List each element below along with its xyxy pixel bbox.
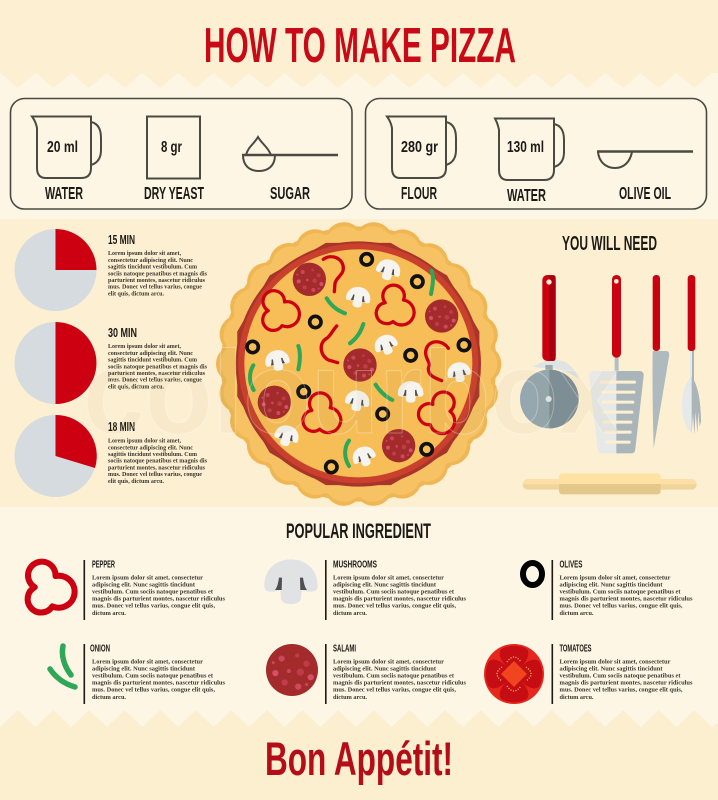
- text block: 15 min: Lorem ipsum dolor sit amet,: [108, 250, 181, 257]
- top background with zigzag edge: [0, 0, 718, 88]
- tool: fork: [682, 275, 701, 434]
- ingredient: salami: vestibulum. Cum sociis natoque penatibus et: [333, 672, 455, 680]
- label: water: WATER: [45, 183, 83, 203]
- icon: pepper: [28, 562, 75, 613]
- ingredient: onion: mus. Donec vel tellus varius, congue elit quis,: [92, 687, 215, 694]
- ingredient: mushrooms: [264, 559, 466, 620]
- text block: 30 min: consectetur adipiscing elit. Nunc: [108, 350, 193, 357]
- icon: olive: [523, 563, 542, 585]
- ingredient: mushrooms: mus. Donec vel tellus varius, congue elit quis,: [333, 603, 456, 610]
- icon: jug 130 ml: 130 ml: [507, 139, 544, 156]
- ingredient: mushrooms: Lorem ipsum dolor sit amet, consectetur: [333, 574, 444, 581]
- icon: jug 130 ml: [495, 118, 564, 180]
- text block: 15 min: parturient montes, nascetur ridiculus: [108, 277, 205, 284]
- ingredient: onion: vestibulum. Cum sociis natoque penatibus et: [92, 672, 214, 680]
- ingredient: mushrooms: magnis dis parturient montes, nascetur ridiculus: [333, 596, 466, 603]
- salami slices: [258, 263, 458, 462]
- ingredient: tomatoes: adipiscing elit. Nunc sagittis tincidunt: [560, 665, 663, 672]
- text block: 15 min: sociis natoque penatibus et magnis dis: [108, 270, 207, 277]
- bottom background with zigzag edge: [0, 710, 718, 800]
- ingredient: olives: mus. Donec vel tellus varius, congue elit quis,: [560, 603, 683, 610]
- panel: ingredients right: [366, 98, 706, 209]
- ingredient: pepper: vestibulum. Cum sociis natoque penatibus et: [92, 588, 214, 596]
- text block: 30 min: parturient montes, nascetur ridiculus: [108, 370, 205, 377]
- tool: knife: [652, 275, 669, 448]
- panel: ingredients left: [10, 98, 352, 209]
- text block: 30 min: sagittis tincidunt vestibulum. Cum: [108, 357, 197, 364]
- ingredient: pepper: Lorem ipsum dolor sit amet, consectetur: [92, 574, 203, 581]
- text block: 15 min: sagittis tincidunt vestibulum. Cum: [108, 264, 197, 271]
- ingredient: salami: magnis dis parturient montes, nascetur ridiculus: [333, 680, 466, 687]
- label: water: WATER: [507, 185, 546, 205]
- text block: 18 min: [108, 419, 207, 485]
- text block: 30 min: elit quis, dictum arcu.: [108, 383, 164, 390]
- icon: jug 280 gr: [387, 116, 456, 178]
- tool: rolling pin: [523, 473, 697, 494]
- onion strips: [250, 271, 433, 466]
- text block: 30 min: mus. Donec vel tellus varius, congue: [108, 377, 202, 384]
- ingredient: onion: [50, 644, 225, 704]
- ingredient: tomatoes: magnis dis parturient montes, nascetur ridiculus: [560, 680, 693, 687]
- ingredient: olives: OLIVES: [560, 560, 583, 570]
- pie chart: 30 min: [14, 322, 96, 404]
- ingredient: mushrooms: MUSHROOMS: [333, 560, 377, 570]
- icon: jug 280 gr: 280 gr: [401, 139, 438, 156]
- ingredient: mushrooms: dictum arcu.: [333, 610, 367, 617]
- ingredient: olives: dictum arcu.: [560, 610, 594, 617]
- icon: dry yeast packet: [147, 116, 200, 178]
- icon: tomato: [484, 644, 544, 704]
- text block: 30 min: [108, 325, 207, 390]
- kitchen tools: [520, 275, 701, 494]
- text block: 30 min: sociis natoque penatibus et magnis dis: [108, 363, 207, 370]
- crust: [221, 226, 496, 502]
- cheese: [244, 249, 472, 477]
- label: sugar: SUGAR: [270, 183, 310, 203]
- icon: dry yeast packet: 8 gr: [161, 139, 182, 156]
- ingredient: olives: magnis dis parturient montes, nascetur ridiculus: [560, 596, 693, 603]
- title: HOW TO MAKE PIZZA: [204, 19, 516, 73]
- ingredient: tomatoes: TOMATOES: [560, 644, 592, 654]
- icon: jug 20 ml: 20 ml: [47, 139, 78, 156]
- text block: 18 min: sagittis tincidunt vestibulum. Cum: [108, 451, 197, 458]
- watermark: colourbox: [83, 327, 620, 459]
- ingredient: tomatoes: vestibulum. Cum sociis natoque penatibus et: [560, 672, 681, 680]
- ingredient: salami: [266, 644, 466, 704]
- ingredient: tomatoes: dictum arcu.: [560, 694, 594, 701]
- text block: 18 min: sociis natoque penatibus et magnis dis: [108, 458, 207, 465]
- text block: 15 min: elit quis, dictum arcu.: [108, 290, 164, 297]
- ingredient: onion: ONION: [90, 644, 110, 654]
- text block: 15 min: [108, 232, 207, 297]
- pepper pieces: [321, 257, 448, 381]
- tool: pizza cutter: [520, 275, 579, 428]
- mushrooms: [263, 257, 472, 470]
- text block: 15 min: 15 MIN: [108, 232, 135, 247]
- tool: spatula: [589, 275, 644, 453]
- text block: 30 min: Lorem ipsum dolor sit amet,: [108, 343, 181, 350]
- ingredient: pepper: [28, 560, 225, 620]
- pizza illustration: [221, 226, 496, 502]
- ingredient: olives: adipiscing elit. Nunc sagittis tincidunt: [560, 581, 663, 588]
- text block: 18 min: Lorem ipsum dolor sit amet,: [108, 438, 181, 445]
- text block: 18 min: mus. Donec vel tellus varius, congue: [108, 471, 202, 478]
- icon: salami: [266, 644, 318, 696]
- middle band background: [0, 219, 718, 507]
- label: olive oil: OLIVE OIL: [619, 183, 671, 203]
- ingredient: tomatoes: [484, 644, 693, 704]
- text block: 18 min: 18 MIN: [108, 419, 135, 434]
- ingredient: onion: Lorem ipsum dolor sit amet, consectetur: [92, 658, 203, 665]
- ingredient: onion: magnis dis parturient montes, nascetur ridiculus: [92, 680, 225, 687]
- text block: 15 min: mus. Donec vel tellus varius, congue: [108, 284, 202, 291]
- heading: popular ingredient: POPULAR INGREDIENT: [286, 520, 431, 543]
- text block: 18 min: consectetur adipiscing elit. Nunc: [108, 444, 193, 451]
- text block: 18 min: elit quis, dictum arcu.: [108, 478, 164, 485]
- icon: jug 20 ml: [32, 116, 101, 178]
- ingredient: salami: mus. Donec vel tellus varius, congue elit quis,: [333, 687, 456, 694]
- icon: mushroom: [264, 559, 318, 604]
- closing message: Bon Appétit!: [265, 732, 453, 785]
- sauce ring: [236, 241, 481, 487]
- heading: you will need: YOU WILL NEED: [562, 233, 657, 255]
- text block: 18 min: parturient montes, nascetur ridiculus: [108, 464, 205, 471]
- label: flour: FLOUR: [401, 183, 437, 203]
- ingredient: pepper: mus. Donec vel tellus varius, congue elit quis,: [92, 603, 215, 610]
- icon: sugar spoon: [242, 137, 338, 171]
- ingredient: salami: Lorem ipsum dolor sit amet, consectetur: [333, 658, 444, 665]
- ingredient: tomatoes: mus. Donec vel tellus varius, congue elit quis,: [560, 687, 683, 694]
- text block: 15 min: consectetur adipiscing elit. Nunc: [108, 257, 193, 264]
- ingredient: salami: dictum arcu.: [333, 694, 367, 701]
- pepper rings: [263, 282, 468, 441]
- ingredient: mushrooms: vestibulum. Cum sociis natoque penatibus et: [333, 588, 455, 596]
- ingredient: pepper: dictum arcu.: [92, 610, 126, 617]
- text block: 30 min: 30 MIN: [108, 325, 137, 340]
- ingredient: olives: Lorem ipsum dolor sit amet, consectetur: [560, 574, 671, 581]
- ingredient: tomatoes: Lorem ipsum dolor sit amet, consectetur: [560, 658, 671, 665]
- icon: olive oil spoon: [597, 152, 693, 168]
- pie chart: 18 min: [14, 415, 97, 497]
- ingredient: salami: SALAMI: [333, 644, 356, 654]
- icon: onion: [50, 646, 75, 687]
- ingredient: mushrooms: adipiscing elit. Nunc sagittis tincidunt: [333, 581, 437, 588]
- ingredient: onion: dictum arcu.: [92, 694, 126, 701]
- label: dry yeast: DRY YEAST: [144, 183, 204, 203]
- ingredient: pepper: magnis dis parturient montes, nascetur ridiculus: [92, 596, 225, 603]
- ingredient: salami: adipiscing elit. Nunc sagittis tincidunt: [333, 665, 437, 672]
- pie chart: 15 min: [14, 229, 96, 311]
- olives: [247, 254, 470, 473]
- ingredient: pepper: adipiscing elit. Nunc sagittis tincidunt: [92, 581, 196, 588]
- ingredient: olives: [523, 560, 693, 620]
- ingredient: olives: vestibulum. Cum sociis natoque penatibus et: [560, 588, 681, 596]
- ingredient: onion: adipiscing elit. Nunc sagittis tincidunt: [92, 665, 196, 672]
- ingredient: pepper: PEPPER: [92, 560, 115, 570]
